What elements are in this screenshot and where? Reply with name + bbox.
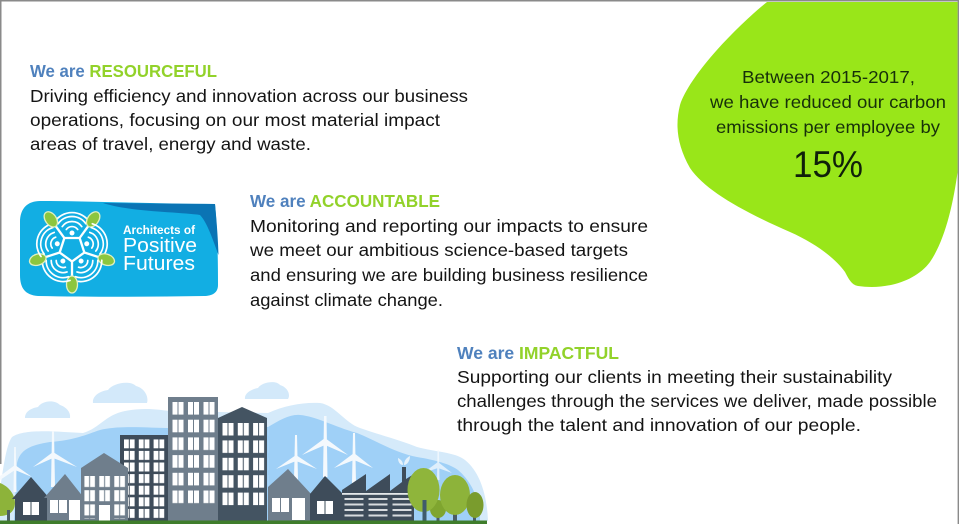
dark tower (218, 407, 268, 521)
dark house right (310, 476, 343, 521)
text block: impactful: challenges through the services we deliver, made possible (457, 391, 937, 411)
grey house left (44, 474, 84, 521)
logo emblem (24, 207, 119, 298)
city illustration (0, 382, 488, 524)
large grey house (81, 453, 129, 521)
blob statement text: emissions per employee by (716, 117, 940, 137)
text block: resourceful: operations, focusing on our most material impact (30, 110, 440, 130)
clouds (25, 382, 289, 418)
text block: resourceful: Driving efficiency and innovation across our business (30, 86, 468, 106)
text block: resourceful: areas of travel, energy and waste. (30, 134, 311, 154)
logo wordmark: Positive (123, 235, 197, 257)
text block: impactful: through the talent and innovation of our people. (457, 415, 861, 435)
logo wordmark: Architects of (123, 225, 195, 237)
blob shape (677, 2, 958, 287)
text block: accountable: We are ACCOUNTABLE (250, 191, 440, 211)
dark apartment block (120, 435, 168, 521)
pale hills (0, 403, 488, 521)
green blob callout (677, 2, 958, 287)
wind turbines (0, 416, 452, 492)
blob statement text: Between 2015-2017, (742, 67, 915, 87)
logo: Architects of Positive Futures (20, 201, 218, 298)
15% figure: 15% (793, 144, 863, 185)
text block: accountable (249, 191, 648, 310)
text block: accountable: Monitoring and reporting our impacts to ensure (250, 216, 648, 236)
text block: resourceful: We are RESOURCEFUL (30, 61, 217, 81)
ground strip (0, 520, 487, 524)
text block: impactful: Supporting our clients in meeting their sustainability (457, 367, 892, 387)
text block: impactful: We are IMPACTFUL (457, 343, 619, 363)
factory (342, 456, 414, 521)
grey tower (168, 397, 218, 521)
grey house right (268, 469, 312, 521)
logo wordmark (123, 225, 197, 275)
blob statement text (709, 67, 946, 137)
logo badge (20, 201, 218, 297)
text block: impactful (457, 343, 937, 435)
blob statement text: we have reduced our carbon (709, 92, 946, 112)
blue hills (14, 415, 480, 521)
text block: accountable: we meet our ambitious science-based targets (249, 240, 628, 260)
text block: resourceful (30, 61, 468, 154)
logo wordmark: Futures (123, 253, 195, 275)
right trees (408, 468, 484, 521)
left trees (0, 483, 15, 516)
text block: accountable: and ensuring we are building business resilience (250, 265, 648, 285)
text block: accountable: against climate change. (250, 290, 443, 310)
logo dark corner (103, 203, 218, 255)
dark house left (12, 477, 50, 521)
